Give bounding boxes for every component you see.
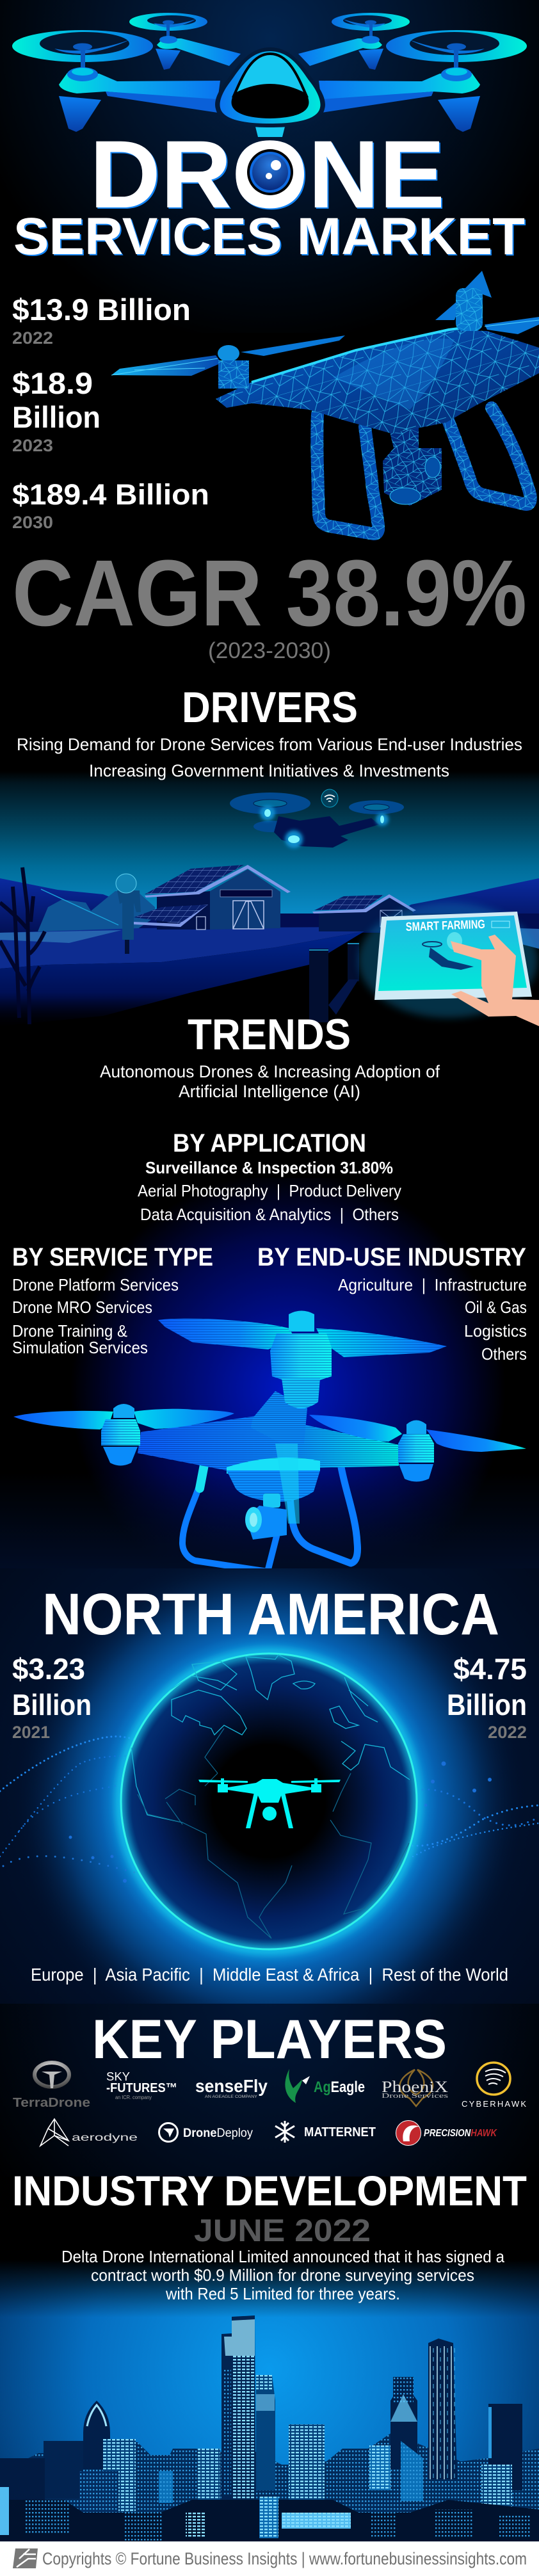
panel: north america (0, 1568, 539, 2004)
mini drone on screen (429, 947, 474, 970)
camera gimbal (383, 427, 442, 506)
camera (245, 1493, 287, 1540)
icon: camera lens in letter O (243, 145, 298, 200)
right rotor and motor (309, 1415, 526, 1481)
logo: Matternet: MATTERNET (304, 2125, 376, 2139)
foreground (0, 2487, 539, 2541)
stat: 2022 (447, 1652, 527, 1742)
night sky (0, 771, 539, 915)
top rotor and motor (158, 1311, 447, 1408)
panel: key players (0, 2004, 539, 2177)
panel: trends (100, 1010, 440, 1101)
footer (0, 2541, 539, 2576)
logo: TerraDrone: TerraDrone (13, 2096, 90, 2110)
logo: Phoenix: Drone Services (382, 2092, 448, 2100)
logo: Cyberhawk (462, 2063, 526, 2109)
logo: PrecisionHawk (396, 2120, 497, 2146)
text: segments line 1: Aerial Photography | Product Delivery (138, 1181, 401, 1200)
heading: key players: KEY PLAYERS (92, 2009, 447, 2070)
left rotor and motor (13, 1404, 234, 1466)
icon: farm drone (230, 793, 404, 848)
stat: 2030 market size: $189.4 Billion (12, 478, 209, 511)
logo: aerodyne: aerodyne (72, 2132, 138, 2143)
sky (0, 2260, 539, 2541)
text: development description: contract worth $0.9 Million for drone surveying services (91, 2266, 474, 2285)
icon: quadcopter logo (12, 13, 527, 137)
stat: 2023 market size: Billion (12, 400, 101, 434)
stat: 2021: 2021 (12, 1723, 50, 1742)
logo: senseFly: AN AGEAGLE COMPANY (205, 2095, 258, 2099)
midground band (275, 914, 539, 933)
date: June 2022: JUNE 2022 (194, 2214, 371, 2248)
landing legs (182, 1461, 358, 1572)
text: development description: with Red 5 Limited for three years. (165, 2284, 400, 2303)
list: industries: Logistics (464, 1321, 527, 1340)
text: driver 2: Increasing Government Initiatives & Investments (89, 761, 449, 780)
text: trend (100, 1062, 440, 1101)
stat: 2030 market size (12, 478, 209, 532)
icon: drone silhouette (198, 1778, 341, 1828)
panel: farm illustration (0, 771, 539, 1027)
logo: aerodyne (40, 2119, 138, 2146)
text: trend: Artificial Intelligence (AI) (179, 1082, 360, 1101)
text: segments line 2: Data Acquisition & Analytics | Others (140, 1205, 399, 1224)
panel: by end-use industry (257, 1243, 527, 1364)
back towers (0, 2375, 522, 2516)
tablet glow (358, 903, 538, 1018)
section background (0, 2004, 539, 2177)
stat: 2021: Billion (12, 1688, 92, 1721)
text: development description: Delta Drone International Limited announced that it has signed a (61, 2247, 505, 2266)
logo: senseFly: senseFly (195, 2076, 268, 2096)
logo: Phoenix: PhoeniX (382, 2079, 448, 2096)
hills (0, 878, 539, 941)
text: trend: Autonomous Drones & Increasing Adoption of (100, 1062, 440, 1081)
tablet: smart farming (374, 912, 532, 1000)
heading: by application: BY APPLICATION (173, 1129, 366, 1157)
diagonal beam (41, 889, 118, 925)
continent outlines (131, 1655, 410, 1823)
motors (218, 288, 483, 389)
stat: 2022: $4.75 (453, 1652, 527, 1686)
panel: by service type (12, 1243, 213, 1357)
title: DRONE: DRONE (90, 120, 445, 228)
heading: service type: BY SERVICE TYPE (12, 1243, 213, 1271)
logo: Fortune Business Insights (13, 2548, 38, 2568)
particle waves (0, 1737, 539, 1881)
globe outer glow (0, 1568, 539, 2004)
footer bar (0, 2541, 539, 2576)
field (0, 927, 539, 1027)
stats column (12, 293, 209, 532)
icon: hand (451, 935, 539, 1026)
logo: Sky Futures: an ICR. company (115, 2095, 152, 2100)
header glow (0, 0, 539, 333)
scattered dots (69, 1762, 492, 1883)
panel: industry development (12, 2167, 527, 2303)
stat: 2022 market size: 2022 (12, 328, 53, 348)
stat: 2030 market size: 2030 (12, 513, 53, 532)
top fade (0, 2260, 539, 2317)
text: leading segment: Surveillance & Inspection 31.80% (145, 1158, 393, 1177)
rotor blades (111, 271, 539, 376)
illustration: hatched blue drone (13, 1311, 526, 1572)
list: service types (12, 1275, 179, 1357)
logo: Sky Futures: SKY (106, 2070, 130, 2083)
section background (0, 1568, 539, 2004)
logo: Phoenix (382, 2070, 448, 2106)
list: industries (338, 1275, 527, 1364)
stat: 2021: $3.23 (12, 1652, 85, 1686)
corn plant (0, 867, 45, 1024)
panel: by application (138, 1129, 401, 1224)
stat: 2021 (12, 1652, 92, 1742)
logo: Matternet (275, 2121, 376, 2143)
distant building mass (0, 2433, 539, 2541)
stat: 2022 market size (12, 293, 191, 348)
logo: DroneDeploy: DroneDeploy (183, 2127, 253, 2140)
title: SERVICES MARKET: SERVICES MARKET (13, 207, 525, 266)
heading: DRIVERS: DRIVERS (182, 683, 358, 732)
scarecrow (116, 874, 141, 954)
logo: DroneDeploy (159, 2123, 253, 2142)
barn (134, 865, 291, 930)
list: service types: Drone MRO Services (12, 1298, 152, 1317)
panel: header (0, 0, 539, 333)
stat: 2023 market size (12, 366, 101, 455)
legs (317, 395, 531, 534)
stat: 2022: 2022 (488, 1723, 527, 1742)
list: service types: Drone Training & (12, 1321, 127, 1340)
second barn (312, 894, 416, 931)
CAGR callout: (2023-2030) (208, 638, 331, 663)
stat: 2023 market size: $18.9 (12, 366, 93, 400)
panel: drivers (17, 683, 522, 780)
logo: TerraDrone (13, 2063, 90, 2110)
list: service types: Simulation Services (12, 1338, 148, 1357)
tablet label: SMART FARMING (405, 918, 485, 934)
right tall tower (428, 2339, 457, 2479)
panel: city skyline (0, 2260, 539, 2541)
logo: Sky Futures (106, 2070, 177, 2100)
heading: north america: NORTH AMERICA (42, 1582, 499, 1647)
stat: 2023 market size: 2023 (12, 436, 53, 455)
list: service types: Drone Platform Services (12, 1275, 179, 1294)
main tower (221, 2315, 256, 2540)
list: industries: Others (481, 1344, 527, 1364)
logo: PrecisionHawk: PRECISIONHAWK (424, 2128, 497, 2139)
text: driver 1: Rising Demand for Drone Services from Various End-user Industries (17, 735, 522, 754)
background glow: second drone (0, 1178, 539, 1568)
icon: wifi badge (321, 789, 338, 807)
list: industries: Agriculture | Infrastructure (338, 1275, 527, 1294)
globe (120, 1652, 418, 1951)
logo: Cyberhawk: CYBERHAWK (462, 2099, 526, 2109)
logo: Sky Futures: -FUTURES™ (106, 2081, 177, 2095)
stat: 2022 market size: $13.9 Billion (12, 293, 191, 326)
fence posts (309, 943, 359, 1022)
illustration: wireframe mesh drone (111, 271, 539, 534)
mid lit buildings (79, 2424, 512, 2529)
logo: AgEagle (285, 2069, 365, 2103)
text: development description (61, 2247, 505, 2303)
heading: TRENDS: TRENDS (188, 1010, 351, 1059)
text: other regions: Europe | Asia Pacific | Middle East & Africa | Rest of the World (31, 1965, 508, 1984)
main body (216, 326, 539, 433)
body (138, 1391, 399, 1524)
hay bales (38, 891, 155, 931)
logo: AgEagle: AgEagle (314, 2079, 365, 2096)
stat: 2022: Billion (447, 1688, 527, 1721)
list: industries: Oil & Gas (465, 1298, 527, 1317)
